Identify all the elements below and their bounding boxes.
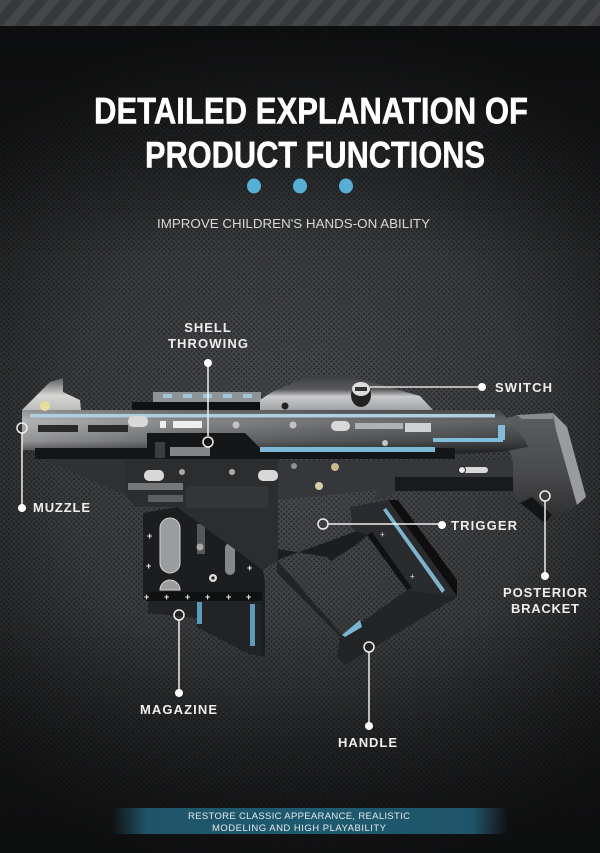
title: [94, 90, 528, 176]
magazine: +: [205, 592, 210, 602]
top stripe band: [0, 0, 600, 26]
title: DETAILED EXPLANATION OF: [94, 90, 528, 132]
callout: switch: SWITCH: [495, 380, 552, 395]
bottom banner: MODELING AND HIGH PLAYABILITY: [212, 823, 387, 834]
magazine: +: [147, 531, 152, 541]
handle and grip frame: [270, 500, 457, 665]
handle and grip frame: +: [380, 530, 385, 539]
bottom banner: [112, 808, 508, 834]
callout: magazine: [140, 610, 217, 717]
callout: shell throwing: SHELL: [184, 320, 232, 335]
callout: posterior bracket: POSTERIOR: [503, 585, 588, 600]
switch knob: [351, 382, 371, 407]
magazine: +: [146, 561, 151, 571]
magazine: +: [164, 592, 169, 602]
callout: switch: [370, 380, 552, 395]
product: toy gun model: [22, 376, 586, 665]
rear stock: [500, 413, 586, 523]
title: PRODUCT FUNCTIONS: [145, 134, 485, 176]
callout: posterior bracket: [503, 491, 588, 616]
magazine: +: [247, 563, 252, 573]
callout: posterior bracket: BRACKET: [511, 601, 579, 616]
receiver and lower body: [37, 457, 530, 570]
callout: handle: [338, 642, 397, 750]
callout: shell throwing: [168, 320, 248, 447]
subtitle: IMPROVE CHILDREN'S HANDS-ON ABILITY: [157, 216, 430, 231]
three blue dots: [247, 178, 353, 194]
magazine: +: [185, 592, 190, 602]
main upper barrel body: [22, 376, 528, 459]
magazine: +: [246, 592, 251, 602]
magazine: +: [226, 592, 231, 602]
callout: handle: HANDLE: [338, 735, 397, 750]
bottom banner: RESTORE CLASSIC APPEARANCE, REALISTIC: [188, 811, 410, 822]
callout: muzzle: MUZZLE: [33, 500, 90, 515]
handle and grip frame: +: [410, 572, 415, 581]
callout: shell throwing: THROWING: [168, 336, 248, 351]
callout: trigger: [318, 518, 518, 533]
magazine: [143, 507, 265, 657]
callout: magazine: MAGAZINE: [140, 702, 217, 717]
callout: trigger: TRIGGER: [451, 518, 518, 533]
callout: muzzle: [17, 423, 90, 515]
magazine: +: [144, 592, 149, 602]
